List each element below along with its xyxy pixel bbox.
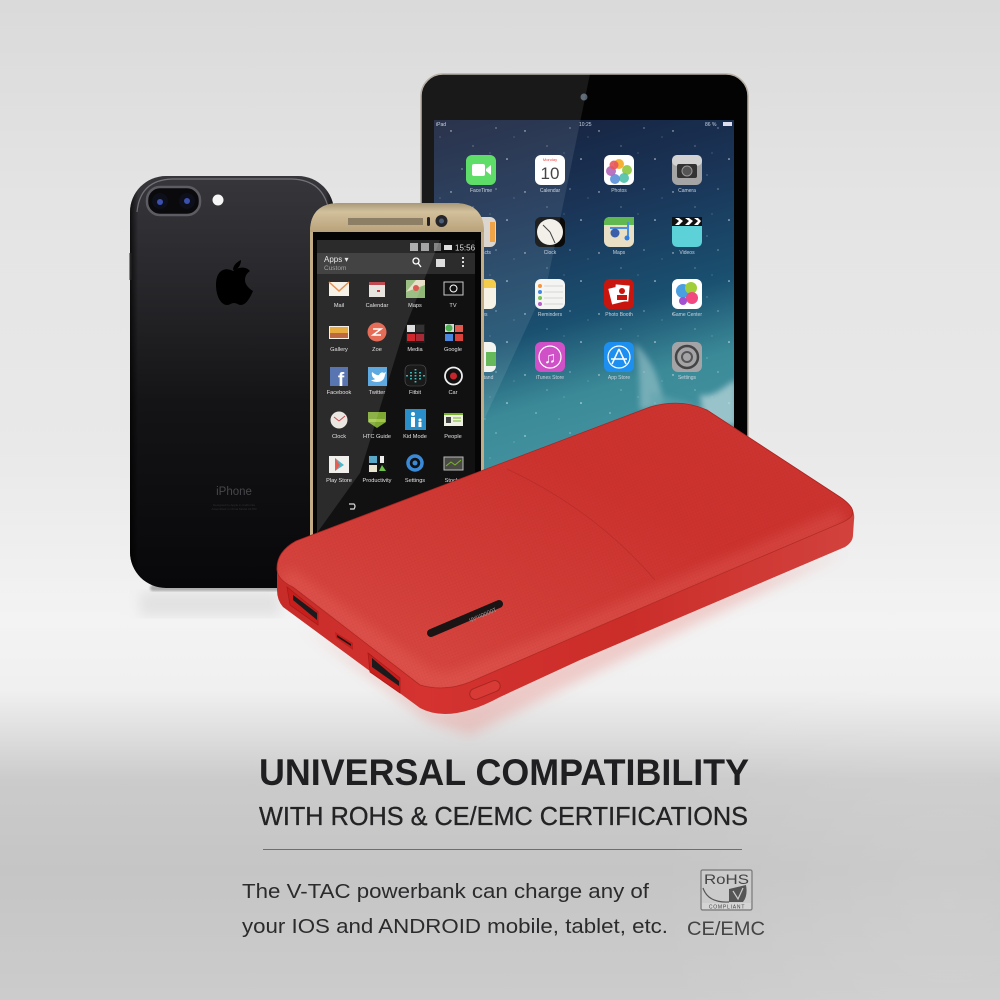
description text: your IOS and ANDROID mobile, tablet, etc. [242, 915, 668, 938]
icon: Car [445, 368, 462, 396]
title: UNIVERSAL COMPATIBILITY [259, 752, 749, 793]
app: FaceTime [466, 155, 496, 194]
app: Newsstand [466, 342, 496, 381]
app: Settings: Settings [678, 375, 697, 381]
app: Photos [604, 155, 634, 194]
powerbank seam [507, 469, 655, 580]
icon: HTC Guide: HTC Guide [363, 434, 391, 440]
description text [242, 880, 668, 938]
CE/EMC mark: CE/EMC [687, 919, 765, 940]
iPhone top rim highlight [137, 179, 329, 212]
icon: Media: Media [407, 347, 423, 353]
icon: Clock: Clock [332, 434, 346, 440]
RoHS compliant badge: RoHS [704, 871, 749, 887]
icon: Stocks [444, 457, 463, 484]
reflection of devices [140, 552, 845, 735]
apple logo icon [216, 260, 253, 305]
app: Calendar [535, 155, 565, 194]
app: Game Center: Game Center [672, 312, 702, 318]
app: Calendar: 10 [541, 164, 559, 183]
phone body [310, 203, 484, 537]
USB port 2 [368, 653, 400, 693]
tablet status bar: iPad [436, 122, 446, 128]
icon: Maps: Maps [408, 303, 422, 309]
icon: Settings: Settings [405, 478, 425, 484]
powerbank [277, 403, 854, 714]
icon: Calendar: Calendar [366, 303, 388, 309]
phone front glass [313, 232, 481, 538]
iPhone back [130, 176, 334, 591]
icon: Fitbit [405, 365, 426, 396]
app: Settings [672, 342, 702, 381]
phone action bar: Apps ▾ [324, 255, 348, 264]
icon: Facebook: f [338, 370, 345, 391]
powerbank surface highlight [285, 518, 843, 683]
icon: Facebook: Facebook [327, 390, 351, 396]
icon: Facebook [327, 367, 351, 396]
phone status bar [410, 243, 476, 252]
app: Contacts [466, 217, 496, 256]
tablet glare [421, 74, 590, 420]
tablet status bar: 86 % [705, 122, 717, 128]
icon: Stocks: Stocks [445, 478, 462, 484]
icon: Zoe [368, 322, 386, 353]
app: Photo Booth: Photo Booth [605, 312, 633, 318]
app: Clock [535, 217, 565, 256]
app: iTunes Store: ♫ [544, 350, 556, 367]
iPhone body [130, 176, 334, 588]
iPhone edge shading [130, 176, 334, 588]
icon: Media [406, 324, 425, 353]
powerbank reflection [300, 552, 845, 735]
icon: Fitbit: Fitbit [409, 390, 422, 396]
app: FaceTime: FaceTime [470, 188, 492, 194]
icon: Productivity [363, 455, 392, 484]
icon: People: People [444, 434, 462, 440]
app: Contacts: Contacts [471, 250, 491, 256]
phone status bar: 15:56 [455, 244, 476, 252]
icon: Clock [330, 412, 348, 440]
divider [263, 849, 742, 850]
icon: Gallery: Gallery [330, 347, 348, 353]
iPhone side button [130, 253, 132, 280]
icon: Mail: Mail [334, 303, 344, 309]
tablet camera [580, 94, 588, 100]
app: Newsstand: Newsstand [469, 375, 494, 381]
micro USB port [335, 632, 353, 650]
RoHS compliant badge: COMPLIANT [709, 904, 745, 910]
HTC smartphone [310, 203, 484, 538]
app: App Store [604, 342, 634, 381]
tablet screen wallpaper [434, 120, 734, 470]
phone gold top [310, 203, 484, 232]
description text: The V-TAC powerbank can charge any of [242, 880, 649, 903]
app: Calendar: Monday [543, 157, 557, 162]
icon: Twitter: Twitter [369, 390, 385, 396]
app: iTunes Store [535, 342, 565, 381]
app: Maps [604, 217, 634, 256]
app: Calendar: Calendar [540, 188, 560, 194]
app: Videos: Videos [679, 250, 695, 256]
icon: TV [444, 282, 463, 309]
icon: Kid Mode: Kid Mode [403, 434, 427, 440]
app: iTunes Store: iTunes Store [536, 375, 564, 381]
icon: Zoe: Zoe [372, 347, 382, 353]
icon: Play Store: Play Store [326, 478, 352, 484]
app: Reminders [535, 279, 565, 318]
iPhone wordmark: iPhone [216, 486, 252, 498]
powerbank surface texture [277, 403, 853, 688]
icon: Twitter [368, 367, 387, 396]
iPhone regulatory text: Assembled in China Model A1784 [211, 507, 257, 511]
iPhone regulatory text: Designed by Apple in California [213, 503, 255, 507]
phone speaker [348, 218, 423, 225]
USB port 1 [287, 587, 318, 625]
icon: Car: Car [448, 390, 458, 396]
icon: HTC Guide [363, 412, 391, 440]
icon: Gallery [329, 326, 349, 353]
iPhone regulatory text [211, 503, 257, 511]
icon: Maps [406, 280, 425, 309]
app: App Store: App Store [608, 375, 630, 381]
tablet [420, 73, 749, 470]
icon: Play Store [326, 456, 352, 484]
app: Notes: Notes [474, 312, 488, 318]
phone glare [317, 240, 440, 533]
phone nav back icon [349, 504, 355, 509]
iPhone dual camera [147, 187, 200, 215]
app: Notes [466, 279, 496, 318]
icon: People [444, 413, 463, 440]
icon: Calendar [366, 282, 388, 309]
phone front camera [427, 215, 448, 227]
icon: Google: Google [444, 347, 462, 353]
powerbank top face [277, 403, 853, 688]
tablet body [421, 74, 748, 544]
iPhone shadow [150, 585, 320, 591]
app: Videos [672, 217, 702, 256]
app: Game Center [672, 279, 702, 318]
icon: Productivity: Productivity [363, 478, 392, 484]
phone action bar: Custom [324, 265, 346, 272]
phone display [317, 240, 475, 535]
icon: Google [444, 324, 463, 353]
tablet status bar [436, 122, 732, 128]
app: Photos: Photos [611, 188, 627, 194]
app: Camera: Camera [678, 188, 696, 194]
app: Reminders: Reminders [538, 312, 563, 318]
powerbank capacity label: 10000mAh [468, 605, 497, 622]
powerbank capacity label [431, 604, 499, 633]
RoHS compliant badge [701, 870, 752, 910]
app: Maps: Maps [613, 250, 626, 256]
power button [468, 679, 502, 701]
app: Clock: Clock [544, 250, 557, 256]
app: Photo Booth [604, 279, 634, 318]
phone action bar [317, 253, 475, 274]
icon: Settings [405, 456, 425, 484]
subtitle: WITH ROHS & CE/EMC CERTIFICATIONS [259, 803, 748, 831]
iPhone reflection [140, 592, 280, 616]
iPhone flash [212, 194, 224, 206]
tablet status bar: 10:25 [579, 122, 592, 128]
app: Camera [672, 155, 702, 194]
icon: Mail [329, 282, 349, 309]
icon: Kid Mode [403, 409, 427, 440]
powerbank body and side band [277, 403, 854, 714]
icon: TV: TV [449, 303, 457, 309]
